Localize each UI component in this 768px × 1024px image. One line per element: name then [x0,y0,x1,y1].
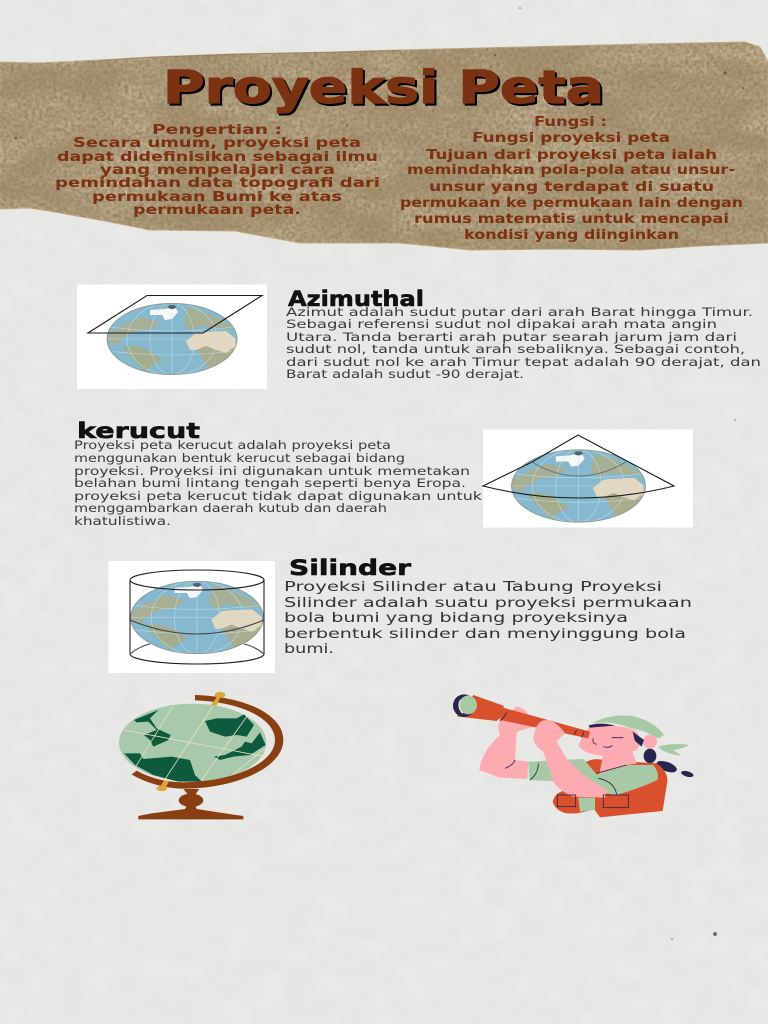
panel: azimuthal diagram [77,284,267,389]
text block: silinder: bumi. [284,641,334,657]
text block: kerucut: menggambarkan daerah kutub dan daerah [74,501,387,515]
icon: desk globe [119,692,283,819]
text block: fungsi: unsur yang terdapat di suatu [429,180,714,195]
text block: fungsi: kondisi yang diinginkan [464,228,679,243]
text block: azimuthal: Sebagai referensi sudut nol dipakai arah mata angin [286,317,717,331]
text block: silinder: Proyeksi Silinder atau Tabung Proyeksi [284,579,662,595]
text block: pengertian: Secara umum, proyeksi peta [73,136,361,151]
text block: kerucut: Proyeksi peta kerucut adalah proyeksi peta [74,438,391,452]
text block: azimuthal: dari sudut nol ke arah Timur tepat adalah 90 derajat, dan [286,355,761,369]
text block: kerucut: khatulistiwa. [74,514,171,528]
panel: kerucut diagram [483,430,693,528]
text block: fungsi: Fungsi proyeksi peta [472,131,670,146]
text block: azimuthal: Azimut adalah sudut putar dari arah Barat hingga Timur. [286,305,753,319]
text block: pengertian: Pengertian : [152,123,282,138]
text block: silinder [284,579,692,657]
text block: azimuthal: Utara. Tanda berarti arah putar searah jarum jam dari [286,330,737,344]
text block: pengertian: permukaan Bumi ke atas [92,190,342,205]
text block: pengertian [55,123,380,218]
text block: fungsi: Tujuan dari proyeksi peta ialah [426,148,717,163]
text block: fungsi: Fungsi : [534,115,607,130]
text block: pengertian: permukaan peta. [133,203,301,218]
text block: azimuthal: sudut nol, tanda untuk arah sebaliknya. Sebagai contoh, [286,342,745,356]
text block: pengertian: pemindahan data topografi dari [55,176,380,191]
icon: explorer with telescope [453,694,694,817]
panel: silinder diagram [108,561,275,673]
text block: fungsi: memindahkan pola-pola atau unsur- [407,163,735,178]
text block: silinder: berbentuk silinder dan menyinggung bola [284,626,686,642]
heading: silinder: Silinder [289,556,412,580]
text block: silinder: bola bumi yang bidang proyeksinya [284,610,628,626]
heading: azimuthal: Azimuthal [288,287,424,311]
text block: kerucut: belahan bumi lintang tengah seperti benya Eropa. [74,476,466,490]
text block: kerucut: menggunakan bentuk kerucut sebagai bidang [74,451,405,465]
text block: fungsi: permukaan ke permukaan lain dengan [400,196,743,211]
text block: kerucut: proyeksi peta kerucut tidak dapat digunakan untuk [74,489,482,503]
text block: pengertian: dapat didefinisikan sebagai ilmu [57,150,378,165]
torn kraft paper header band [0,40,768,255]
heading: kerucut: kerucut [77,419,200,443]
text block: azimuthal [286,305,761,381]
text block: fungsi: rumus matematis untuk mencapai [414,212,729,227]
text block: fungsi [400,115,743,243]
text block: azimuthal: Barat adalah sudut -90 derajat. [286,367,524,381]
text block: kerucut: proyeksi. Proyeksi ini digunakan untuk memetakan [74,464,470,478]
text block: silinder: Silinder adalah suatu proyeksi permukaan [284,595,692,611]
title: Proyeksi Peta [163,61,604,114]
text block: pengertian: yang mempelajari cara [100,163,335,178]
text block: kerucut [74,438,482,528]
title: Proyeksi Peta [165,63,606,116]
